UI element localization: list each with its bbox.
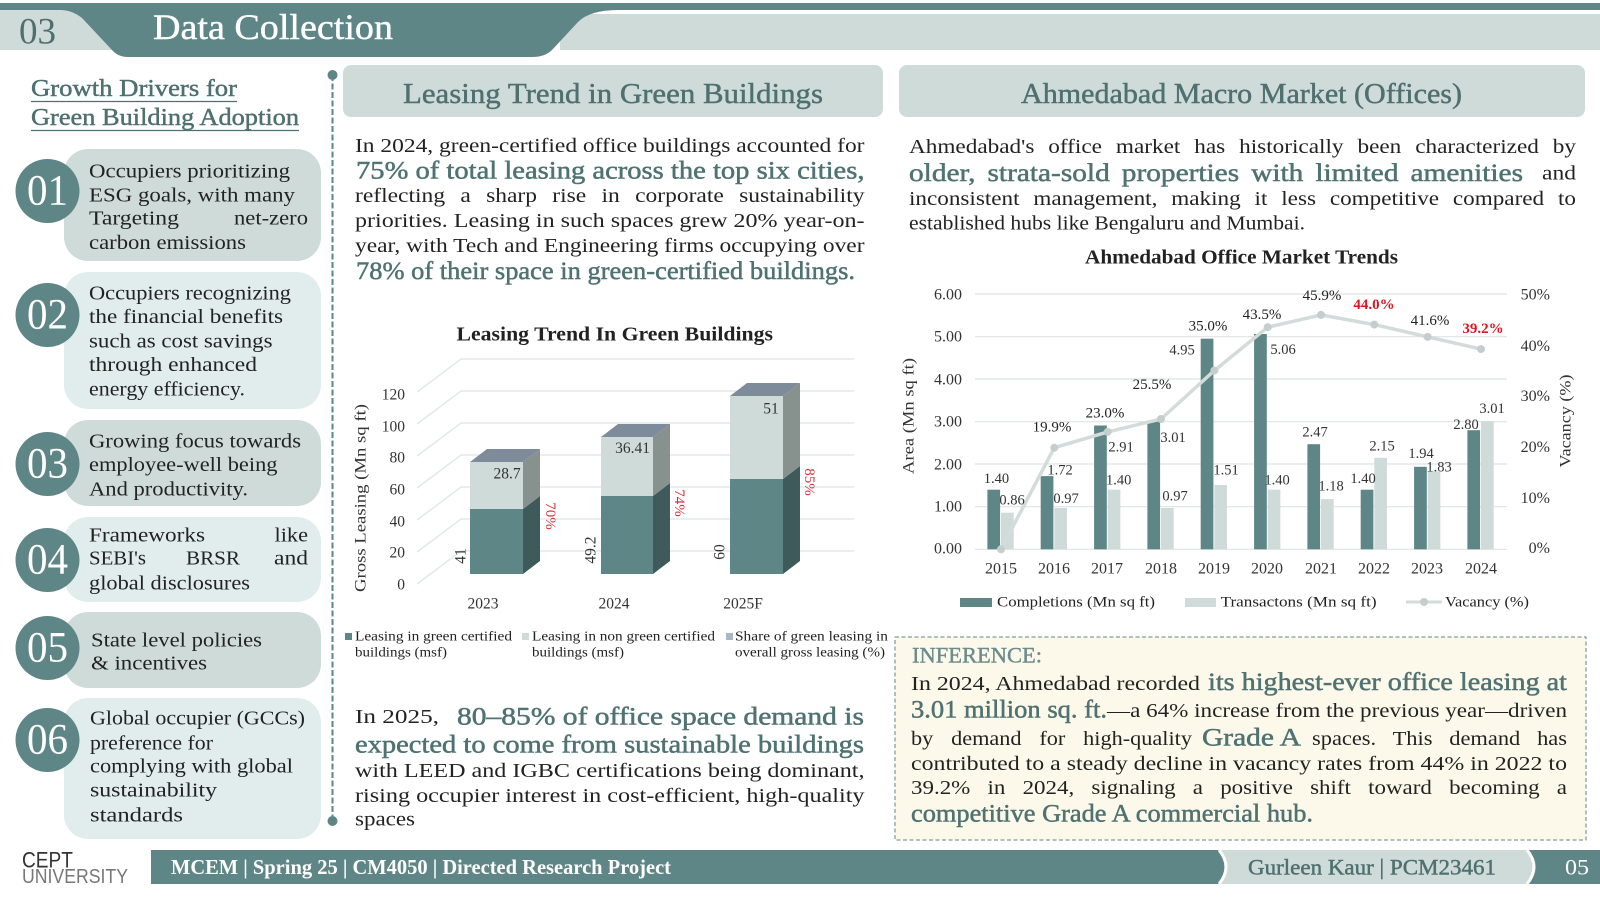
footer bar: [151, 850, 1600, 884]
driver 01: carbon emissions: [89, 233, 246, 254]
bar data labels: 1.18: [1318, 479, 1344, 495]
inference body: 3.01 million sq. ft.: [911, 696, 1107, 724]
text block: Ahmedabad market: inconsistent management, making it less competitive compared to: [909, 188, 1576, 210]
chart title: Ahmedabad Office Market Trends: [1085, 248, 1398, 268]
bar data labels: 2.80: [1453, 417, 1479, 433]
driver 02: energy efficiency.: [89, 380, 245, 400]
bar data labels: 5.06: [1270, 342, 1296, 358]
chart: Ahmedabad office market trends: [900, 248, 1574, 610]
left axis labels: 6.00: [934, 286, 962, 304]
bar data labels: 1.40: [1106, 473, 1131, 489]
right axis labels: 20%: [1521, 439, 1550, 456]
bar 2024: [601, 424, 670, 574]
driver 04: SEBI's: [89, 548, 146, 570]
data labels: [452, 400, 779, 564]
x axis labels: 2023: [468, 596, 499, 612]
driver 06: [16, 698, 321, 839]
driver 02: through enhanced: [89, 355, 257, 376]
driver 01: net-zero: [234, 208, 308, 230]
inference body: In 2024, Ahmedabad recorded: [911, 673, 1200, 695]
driver 03: Growing focus towards: [89, 432, 301, 452]
year labels: 2019: [1198, 560, 1230, 578]
text block: Ahmedabad market: older, strata-sold properties with limited amenities: [909, 160, 1523, 187]
y axis labels: 20: [390, 544, 405, 562]
driver 06: sustainability: [90, 780, 217, 802]
bar data labels: 3.01: [1479, 401, 1505, 417]
driver 01: Targeting: [89, 208, 179, 230]
bar data labels: [984, 342, 1505, 509]
driver 02: Occupiers recognizing: [89, 284, 291, 304]
transactions bars: [1001, 421, 1494, 549]
year labels: 2021: [1305, 560, 1337, 578]
y axis labels: 80: [390, 450, 405, 466]
data labels: 36.41: [615, 440, 650, 457]
completions bars: [987, 334, 1480, 549]
driver 04: [16, 517, 321, 602]
data labels: 60: [712, 544, 728, 560]
chart legend: Transactons (Mn sq ft): [1221, 594, 1377, 610]
vacancy data labels: 43.5%: [1243, 307, 1281, 323]
bar 2025F: [730, 383, 800, 574]
right axis labels: 30%: [1521, 388, 1550, 405]
inference body: contributed to a steady decline in vacancy rates from 44% in 2022 to: [911, 753, 1567, 775]
year labels: 2015: [985, 560, 1017, 578]
y axis labels: 0: [397, 576, 405, 594]
bar data labels: 0.86: [999, 493, 1025, 509]
inference body: spaces. This demand has: [1312, 728, 1567, 750]
vacancy data labels: 25.5%: [1133, 377, 1171, 393]
header banner: [0, 3, 1600, 57]
driver 03: employee-well being: [89, 455, 278, 476]
driver 02: [16, 272, 321, 409]
text block: Ahmedabad market: Ahmedabad's office market has historically been characterized by: [909, 136, 1576, 158]
bar data labels: 4.95: [1169, 343, 1195, 359]
text block: 2025 outlook: spaces: [355, 808, 415, 830]
text block: leasing 2024: reflecting a sharp rise in corporate sustainability: [355, 185, 864, 207]
vacancy line: [997, 311, 1485, 553]
right axis labels: 10%: [1521, 490, 1550, 507]
driver 06: Global occupier (GCCs): [90, 708, 305, 730]
driver 06: 06: [27, 716, 68, 764]
right axis labels: 40%: [1521, 338, 1550, 355]
left axis labels: 0.00: [934, 540, 962, 558]
driver 02: the financial benefits: [89, 307, 283, 328]
driver 01: ESG goals, with many: [89, 186, 295, 206]
right axis labels: 50%: [1521, 286, 1550, 304]
legend: Share of green leasing in: [735, 628, 888, 644]
inference body: 39.2% in 2024, signaling a positive shift toward becoming a: [911, 777, 1567, 799]
vacancy data labels: 35.0%: [1189, 319, 1227, 335]
bar data labels: 1.40: [1264, 473, 1290, 489]
vacancy data labels: 41.6%: [1411, 313, 1449, 329]
legend: Leasing in non green certified: [532, 628, 715, 644]
logo: CEPT University: UNIVERSITY: [22, 866, 128, 888]
driver 04: BRSR: [186, 548, 240, 570]
right axis title: Vacancy (%): [1558, 374, 1574, 468]
bar data labels: 1.40: [984, 471, 1009, 487]
heading panel: macro market: Ahmedabad Macro Market (Offices): [1021, 78, 1462, 110]
driver 05: & incentives: [91, 654, 207, 674]
y axis labels: 60: [390, 482, 405, 498]
bar data labels: 1.94: [1408, 446, 1434, 462]
year labels: 2024: [1465, 560, 1497, 578]
inference body: —a 64% increase from the previous year—driven: [1106, 700, 1567, 722]
heading: growth drivers: Growth Drivers for: [31, 76, 237, 102]
y axis labels: 40: [390, 514, 405, 530]
vacancy data labels: 45.9%: [1303, 288, 1341, 304]
right axis labels: 0%: [1529, 540, 1550, 557]
y axis labels: 120: [382, 386, 405, 404]
text block: 2025 outlook: with LEED and IGBC certifications being dominant,: [355, 760, 864, 782]
x axis labels: [468, 596, 763, 612]
text block: 2025 outlook: expected to come from sustainable buildings: [355, 732, 864, 758]
year labels: 2018: [1145, 560, 1177, 578]
inference body: [911, 669, 1567, 828]
year labels: 2020: [1251, 560, 1283, 578]
data labels: 28.7: [493, 466, 521, 482]
x axis labels: 2024: [598, 596, 630, 612]
driver 04: Frameworks: [89, 526, 205, 546]
inference body: its highest-ever office leasing at: [1208, 669, 1567, 696]
inference body: by demand for high-quality: [911, 728, 1192, 750]
year labels: 2023: [1411, 560, 1443, 578]
vertical dashed divider: [328, 70, 338, 826]
driver 04: 04: [27, 536, 68, 584]
logo: CEPT University: CEPT: [22, 848, 73, 872]
driver 02: such as cost savings: [89, 332, 272, 352]
text block: 2025 outlook: rising occupier interest in cost-efficient, high-quality: [355, 785, 864, 807]
bar data labels: 2.47: [1302, 425, 1328, 441]
driver 05: 05: [27, 624, 68, 672]
chart legend: [960, 594, 1529, 610]
y axis labels: 100: [382, 418, 405, 436]
text block: leasing 2024: 75% of total leasing across the top six cities,: [356, 158, 864, 184]
driver 04: global disclosures: [89, 574, 250, 594]
text block: leasing 2024: [355, 135, 865, 285]
bar data labels: 2.91: [1108, 440, 1134, 456]
inference heading: INFERENCE:: [912, 642, 1042, 668]
bar 2023: [470, 449, 540, 574]
legend: buildings (msf): [532, 644, 624, 660]
driver 06: complying with global: [90, 756, 294, 778]
text block: Ahmedabad market: and: [1542, 162, 1576, 184]
driver 05: State level policies: [91, 630, 262, 652]
year labels: 2017: [1091, 560, 1123, 578]
text block: 2025 outlook: In 2025,: [355, 706, 439, 728]
left axis labels: 4.00: [934, 372, 962, 388]
text block: Ahmedabad market: established hubs like Bengaluru and Mumbai.: [909, 212, 1305, 234]
chart title: Leasing Trend In Green Buildings: [456, 324, 773, 346]
driver 05: [16, 612, 321, 688]
year labels: 2022: [1358, 560, 1390, 578]
text block: 2025 outlook: 80–85% of office space demand is: [457, 704, 864, 730]
driver 04: and: [274, 548, 308, 570]
x axis labels: 2025F: [723, 596, 763, 612]
footer author: Gurleen Kaur | PCM23461: [1248, 854, 1496, 880]
left axis title: Area (Mn sq ft): [900, 358, 918, 474]
vacancy data labels: [1033, 288, 1504, 436]
chart: leasing trend in green buildings: [345, 324, 888, 660]
heading panel: leasing trend: [343, 65, 883, 117]
data labels: 51: [763, 400, 779, 418]
bar data labels: 1.72: [1047, 463, 1073, 479]
chart legend: Completions (Mn sq ft): [997, 594, 1155, 610]
data labels: 41: [452, 548, 470, 564]
driver 01: Occupiers prioritizing: [89, 162, 290, 182]
legend: [345, 628, 888, 660]
inference body: Grade A: [1202, 724, 1301, 752]
driver 04: like: [274, 526, 308, 546]
bar data labels: 1.83: [1426, 460, 1452, 476]
legend: buildings (msf): [355, 644, 447, 660]
inference body: competitive Grade A commercial hub.: [911, 800, 1313, 828]
left axis labels: 3.00: [934, 414, 962, 430]
text block: leasing 2024: priorities. Leasing in such spaces grew 20% year-on-: [355, 210, 864, 232]
left axis labels: [934, 286, 962, 558]
footer page number: 05: [1565, 854, 1589, 880]
driver 03: [16, 420, 321, 506]
text block: Ahmedabad market: [909, 136, 1576, 234]
share percentage labels: 74%: [671, 489, 687, 517]
year labels: 2016: [1038, 560, 1070, 578]
text block: leasing 2024: In 2024, green-certified office buildings accounted for: [355, 135, 865, 157]
chart legend: Vacancy (%): [1445, 594, 1529, 610]
vacancy data labels: 44.0%: [1353, 297, 1395, 313]
page title: Data Collection: [153, 7, 393, 47]
share percentage labels: 70%: [542, 502, 558, 530]
left axis labels: 1.00: [934, 498, 962, 516]
driver 06: preference for: [90, 734, 214, 754]
year labels: [985, 560, 1497, 578]
bar data labels: 0.97: [1162, 489, 1188, 505]
share percentage labels: [542, 468, 817, 530]
vacancy data labels: 19.9%: [1033, 420, 1071, 436]
section number: 03: [19, 12, 56, 52]
driver 01: [16, 149, 321, 261]
bar data labels: 1.40: [1350, 471, 1376, 487]
y axis labels: [382, 386, 405, 594]
driver 02: 02: [27, 292, 68, 338]
heading: growth drivers: [31, 76, 299, 131]
heading panel: macro market: [899, 65, 1585, 117]
left axis labels: 5.00: [934, 328, 962, 346]
panel: inference: [895, 637, 1586, 840]
text block: leasing 2024: year, with Tech and Engineering firms occupying over: [355, 235, 865, 257]
bar data labels: 2.15: [1369, 439, 1395, 455]
footer course text: MCEM | Spring 25 | CM4050 | Directed Research Project: [171, 855, 671, 879]
heading: growth drivers: Green Building Adoption: [31, 105, 299, 131]
share percentage labels: 85%: [801, 468, 817, 496]
legend: overall gross leasing (%): [735, 644, 885, 660]
bar data labels: 1.51: [1213, 463, 1239, 479]
driver 06: standards: [90, 806, 183, 826]
left axis labels: 2.00: [934, 456, 962, 474]
driver 03: And productivity.: [89, 480, 248, 500]
vacancy data labels: 39.2%: [1462, 321, 1504, 337]
bar data labels: 3.01: [1160, 430, 1186, 446]
legend: Leasing in green certified: [355, 628, 512, 644]
driver 03: 03: [27, 440, 68, 488]
data labels: 49.2: [582, 536, 600, 564]
driver 01: 01: [27, 168, 68, 214]
y axis title: Gross Leasing (Mn sq ft): [352, 404, 370, 592]
bar data labels: 0.97: [1053, 491, 1079, 507]
right axis labels: [1521, 286, 1550, 557]
logo: CEPT University: [22, 848, 128, 888]
heading panel: leasing trend: Leasing Trend in Green Buildings: [403, 78, 823, 110]
text block: leasing 2024: 78% of their space in green-certified buildings.: [356, 258, 855, 285]
text block: 2025 outlook: [355, 704, 864, 830]
vacancy data labels: 23.0%: [1086, 406, 1124, 422]
